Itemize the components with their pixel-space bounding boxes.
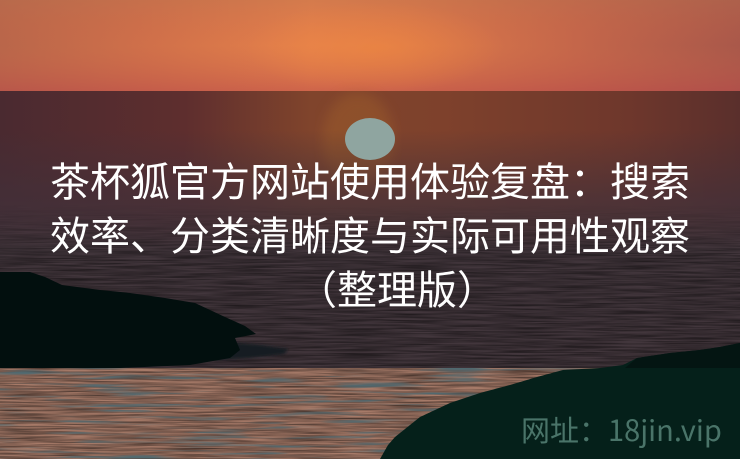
left island — [0, 272, 256, 368]
title: 效率、分类清晰度与实际可用性观察 — [50, 204, 690, 262]
dark sea under overlay — [0, 91, 740, 368]
sun — [345, 118, 395, 160]
headland upper dark band — [625, 343, 740, 368]
sky — [0, 0, 740, 91]
title: （整理版） — [297, 258, 497, 316]
watermark: 网址：18jin.vip — [521, 408, 722, 450]
right headland — [380, 343, 740, 459]
island spit shadow — [215, 342, 288, 360]
title — [50, 150, 690, 316]
bright water foreground — [0, 368, 740, 459]
title: 茶杯狐官方网站使用体验复盘：搜索 — [50, 150, 690, 208]
